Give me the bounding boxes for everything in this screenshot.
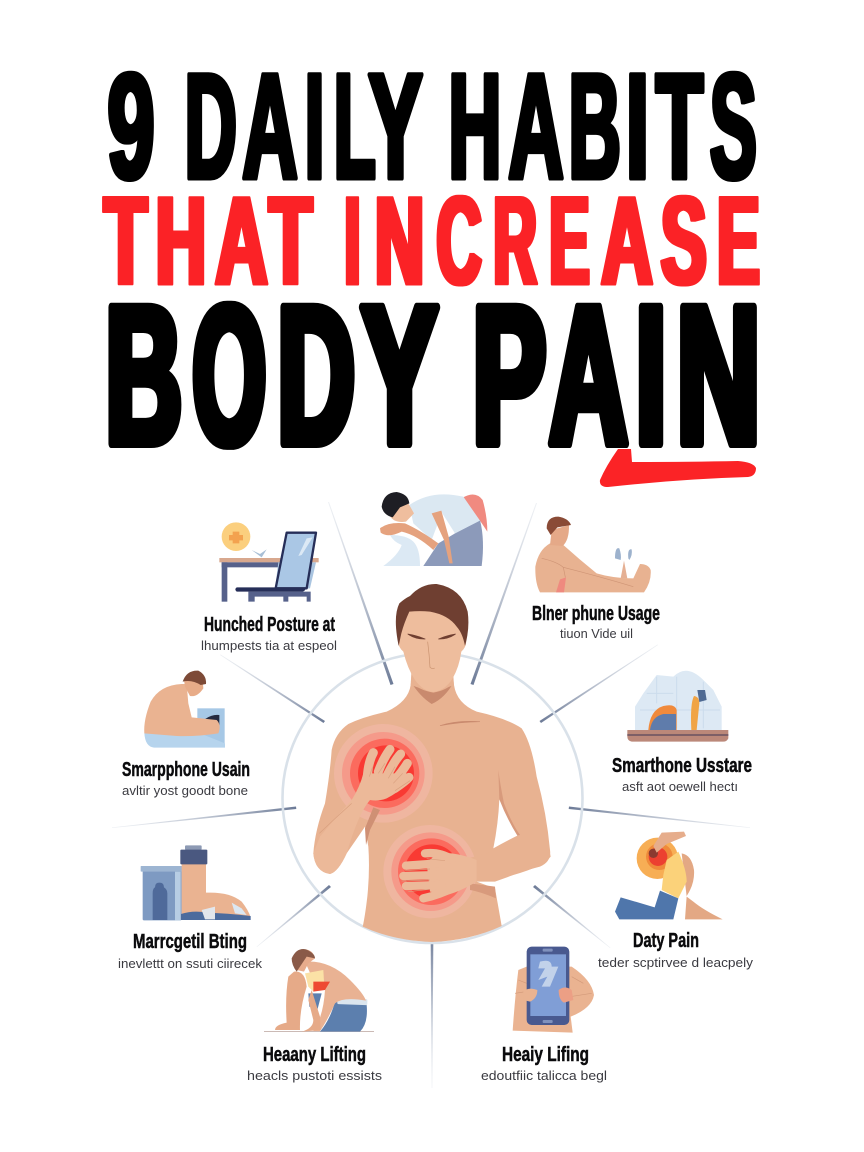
jeans — [615, 891, 678, 919]
habit: hunched person at device — [144, 671, 225, 748]
title line: body pain — [106, 264, 760, 486]
pain circles — [637, 838, 678, 879]
arm shading — [542, 558, 633, 587]
label: smartphone left — [122, 759, 250, 798]
title line: that increase: E — [717, 172, 760, 311]
forearm — [653, 832, 686, 853]
nose — [428, 642, 435, 669]
lower forearm overlap — [467, 833, 551, 882]
chest pain glow — [334, 724, 433, 823]
label: hunched posture: Hunched Posture at — [204, 614, 335, 636]
head — [295, 949, 315, 972]
collarbone — [440, 721, 480, 726]
building — [635, 671, 722, 730]
face — [550, 525, 569, 546]
central figure — [313, 584, 551, 942]
neck shadow — [411, 682, 454, 704]
title line: 9 daily habits: H — [449, 42, 501, 210]
title — [104, 42, 760, 486]
plant — [621, 561, 627, 578]
title line: 9 daily habits: D — [185, 42, 237, 210]
phone — [527, 947, 569, 1025]
title line: body pain: I — [636, 264, 666, 486]
label: bad phone usage — [532, 603, 660, 641]
title line: body pain: O — [193, 264, 266, 486]
orange half dome — [648, 705, 677, 730]
back — [144, 684, 220, 736]
label: hunched posture — [201, 614, 337, 653]
title line: body pain: P — [473, 264, 546, 486]
label: daily pain — [598, 930, 754, 970]
label: smartphone left: avltir yost goodt bone — [122, 783, 248, 798]
title line: that increase: A — [602, 172, 652, 311]
title line: body pain: A — [550, 264, 628, 486]
title line: 9 daily habits: A — [508, 42, 564, 210]
arm shadow — [498, 770, 520, 836]
sink — [383, 535, 420, 566]
fingers — [523, 989, 537, 1002]
title line: body pain: Y — [362, 264, 438, 486]
label: heavy lifting right: edoutfiic talicca begl — [481, 1068, 607, 1083]
under frame — [275, 562, 316, 588]
abdomen hand — [402, 853, 477, 898]
hair — [547, 517, 571, 535]
head — [184, 680, 203, 696]
title line: 9 daily habits: B — [569, 42, 621, 210]
gap between arm and waist — [493, 799, 519, 848]
title line: body pain: D — [278, 264, 355, 486]
title line: that increase: A — [216, 172, 268, 311]
label: daily pain: Daty Pain — [633, 930, 699, 952]
chest hand and forearm — [313, 749, 410, 874]
head — [396, 584, 468, 693]
title line: 9 daily habits: Y — [368, 42, 422, 210]
hair — [396, 584, 468, 646]
title line: 9 daily habits: I — [305, 42, 324, 210]
title line: that increase: C — [437, 172, 481, 311]
title line: that increase: T — [269, 172, 312, 311]
laptop screen — [276, 533, 316, 588]
shirt — [409, 494, 480, 540]
title line: 9 daily habits: A — [242, 42, 298, 210]
label: smartphone left: Smarpphone Usain — [122, 759, 250, 781]
habit: kneeling person — [264, 949, 374, 1032]
title line: 9 daily habits — [108, 42, 757, 210]
shelf — [627, 730, 728, 742]
habit: shelf with pale building — [627, 671, 728, 742]
device — [197, 708, 225, 747]
label: left box: Marrcgetil Bting — [133, 931, 247, 953]
title line: that increase: S — [661, 172, 706, 311]
bottle — [691, 696, 699, 730]
title line: body pain: B — [106, 264, 182, 486]
chest glow — [305, 970, 324, 992]
habit: phone in hands — [513, 947, 594, 1033]
central ring — [282, 653, 582, 943]
waist shadow — [470, 883, 496, 898]
label: heavy lifting left — [247, 1044, 383, 1083]
shorts — [556, 577, 566, 592]
title line: that increase: T — [104, 172, 147, 311]
title line: that increase: R — [494, 172, 537, 311]
laptop base — [235, 587, 305, 592]
title line: that increase: N — [375, 172, 424, 311]
title line: 9 daily habits: T — [656, 42, 703, 210]
body — [535, 543, 651, 592]
small plant — [252, 549, 267, 557]
title line: body pain: N — [677, 264, 760, 486]
label: smartphone right: asft aot oewell hectı — [622, 779, 738, 794]
red back glow — [462, 495, 487, 532]
trousers — [144, 731, 225, 748]
title line: 9 daily habits: I — [626, 42, 649, 210]
side shadow under chest arm — [365, 807, 380, 845]
label: heavy lifting right — [481, 1044, 607, 1083]
label: heavy lifting left: heacls pustoti essists — [247, 1068, 383, 1083]
forearm — [380, 523, 438, 550]
connector rays — [112, 502, 750, 1088]
box — [143, 868, 182, 920]
title line: that increase: I — [345, 172, 360, 311]
text: S — [710, 42, 757, 210]
habit: seated pain twist — [615, 832, 723, 919]
abdomen pain glow — [383, 825, 477, 918]
title line: that increase: H — [156, 172, 206, 311]
cap — [185, 845, 202, 850]
label: left box: inevlettt on ssuti ciirecek — [118, 956, 262, 971]
label: heavy lifting left: Heaany Lifting — [263, 1044, 366, 1066]
habit: top centre hunched person — [380, 492, 487, 566]
rear leg — [682, 853, 723, 919]
ground — [264, 1030, 374, 1033]
label: heavy lifting right: Heaiy Lifing — [502, 1044, 589, 1066]
habit: box with leg — [141, 845, 251, 920]
upper arm — [432, 511, 453, 563]
label: bad phone usage: Blner phune Usage — [532, 603, 660, 625]
red underline swoosh — [600, 449, 756, 487]
back — [305, 962, 366, 1031]
leg — [182, 864, 251, 917]
habit: seated person reaching feet — [535, 517, 651, 592]
title line: that increase: E — [550, 172, 589, 311]
sun plus badge — [222, 522, 250, 551]
face — [398, 603, 466, 692]
neck — [411, 667, 454, 693]
label: left box — [118, 931, 262, 971]
face — [389, 503, 414, 522]
title line: 9 daily habits: 9 — [108, 42, 155, 210]
title line: that increase — [104, 172, 760, 311]
jeans — [181, 912, 251, 920]
eyebrows — [408, 634, 456, 639]
arm front — [275, 972, 307, 1030]
trousers — [423, 520, 483, 566]
jeans — [320, 1002, 367, 1032]
hands — [513, 967, 594, 1033]
habit: desk and laptop — [219, 522, 319, 602]
title line: 9 daily habits: L — [334, 42, 376, 210]
label: hunched posture: lhumpests tia at espeol — [201, 638, 337, 653]
label: smartphone right — [612, 755, 752, 794]
torso and arms — [313, 677, 550, 942]
knot — [202, 907, 215, 919]
desk — [219, 558, 319, 562]
shirt — [662, 852, 687, 898]
label: smartphone right: Smarthone Usstare — [612, 755, 752, 777]
hair — [382, 492, 409, 517]
label: daily pain: teder scptirvee d leacpely — [598, 955, 754, 970]
screen squiggle — [538, 961, 558, 987]
label: bad phone usage: tiuon Vide uil — [560, 626, 633, 641]
